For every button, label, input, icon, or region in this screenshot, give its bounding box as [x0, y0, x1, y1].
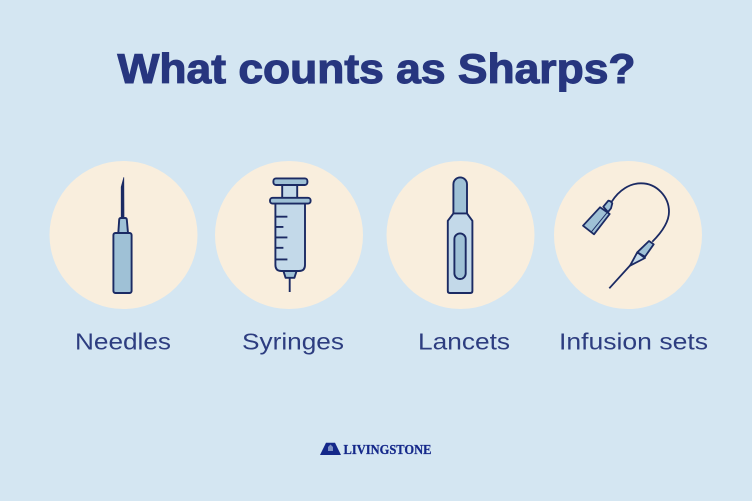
circle: infusion sets background [554, 161, 702, 309]
icon: lancet [448, 177, 472, 293]
circle: needles background [50, 161, 198, 309]
label: Lancets: Lancets [418, 328, 510, 354]
icon: needle [113, 178, 132, 293]
icon: infusion set [583, 183, 669, 288]
panel: infusion sets [554, 161, 708, 354]
panel: needles [50, 161, 198, 354]
label: Infusion sets: Infusion sets [559, 328, 708, 354]
panel: syringes [215, 161, 363, 354]
title: What counts as Sharps? [118, 45, 636, 92]
label: Syringes: Syringes [242, 328, 344, 354]
icon: logo triangle mark [320, 443, 341, 455]
logo wordmark: LIVINGSTONE [344, 442, 432, 457]
logo: Livingstone [320, 442, 432, 457]
label: Needles: Needles [75, 328, 171, 354]
circle: lancets background [386, 161, 534, 309]
icon: syringe [270, 178, 311, 292]
circle: syringes background [215, 161, 363, 309]
panel: lancets [386, 161, 534, 354]
